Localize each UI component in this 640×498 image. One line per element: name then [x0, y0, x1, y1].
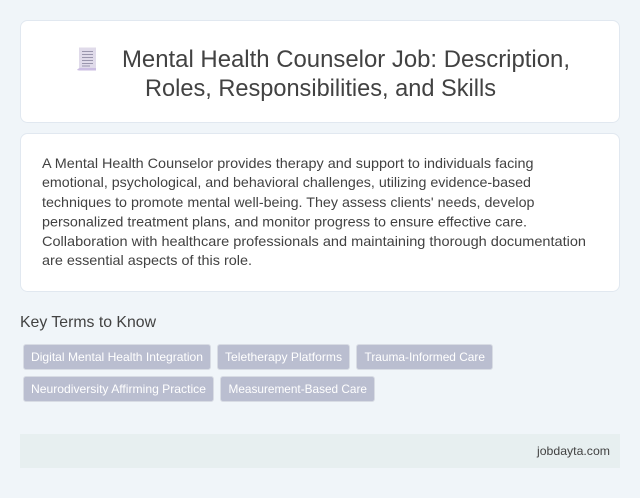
description text: techniques to promote mental well-being. They assess clients' needs, develop: [42, 194, 535, 210]
footer bar: jobdayta.com: [536, 444, 610, 458]
tag: Neurodiversity Affirming Practice: [24, 376, 214, 402]
title text: [122, 46, 570, 102]
icon: document scroll: [77, 48, 96, 70]
title text: Mental Health Counselor Job: Description,: [122, 46, 570, 73]
tag: Teletherapy Platforms: Teletherapy Platforms: [225, 350, 342, 364]
description text: Collaboration with healthcare professionals and maintaining thorough documentation: [42, 233, 586, 249]
description text: emotional, psychological, and behavioral challenges, utilizing evidence-based: [42, 174, 531, 190]
description text: [42, 155, 586, 268]
panel: title card: [20, 20, 620, 122]
title text: Roles, Responsibilities, and Skills: [145, 75, 496, 102]
tag: Digital Mental Health Integration: Digital Mental Health Integration: [31, 350, 203, 364]
description text: A Mental Health Counselor provides therapy and support to individuals facing: [42, 155, 534, 171]
tag: Neurodiversity Affirming Practice: Neurodiversity Affirming Practice: [31, 382, 206, 396]
tag: Measurement-Based Care: Measurement-Based Care: [228, 382, 367, 396]
footer bar: [20, 434, 620, 468]
description text: are essential aspects of this role.: [42, 252, 252, 268]
tag: Trauma-Informed Care: Trauma-Informed Care: [364, 350, 485, 364]
tag: Trauma-Informed Care: [356, 344, 492, 370]
tag: Measurement-Based Care: [220, 376, 374, 402]
tag: Digital Mental Health Integration: [24, 344, 210, 370]
description text: personalized treatment plans, and monitor progress to ensure effective care.: [42, 214, 527, 230]
tag: Teletherapy Platforms: [218, 344, 350, 370]
heading: key terms: Key Terms to Know: [20, 314, 156, 331]
panel: description card: [20, 134, 620, 292]
